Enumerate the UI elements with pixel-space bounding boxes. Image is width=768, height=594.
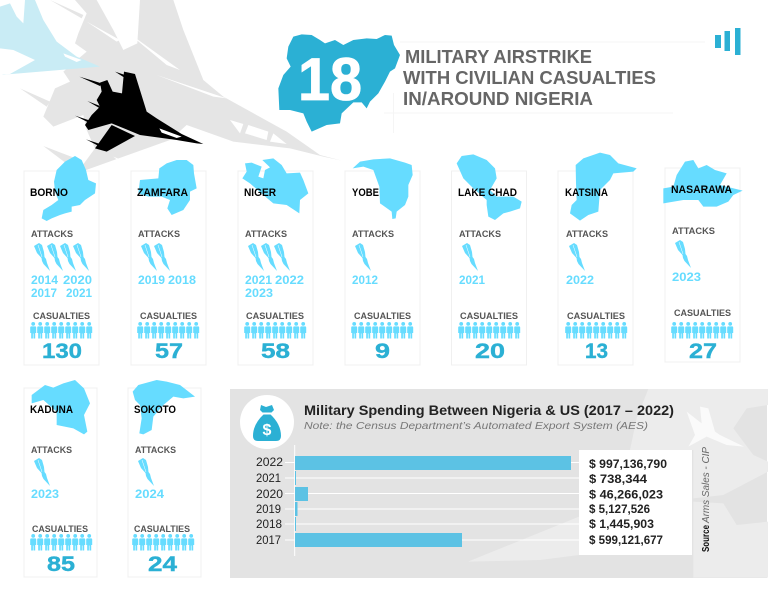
panel: Nasarawa <box>663 160 743 363</box>
panel: Nasarawa: NASARAWA <box>671 184 732 196</box>
bar chart: 2017 <box>256 535 281 547</box>
panel: Nasarawa: 27 <box>689 340 717 363</box>
panel: Borno: ATTACKS <box>31 229 73 239</box>
panel: Borno: BORNO <box>30 187 68 199</box>
panel: Nasarawa: 2023 <box>672 270 701 284</box>
panel: Niger: ATTACKS <box>245 229 287 239</box>
panel: Lake Chad: LAKE CHAD <box>458 187 517 199</box>
panel: Katsina: KATSINA <box>565 187 608 199</box>
logo: three bars <box>715 28 740 55</box>
value table: $ 1,445,903 <box>589 519 654 531</box>
panel: Zamfara: 2018 <box>168 273 196 287</box>
panel: Sokoto: 24 <box>148 553 177 576</box>
background jet: large grey silhouette <box>20 0 342 173</box>
faint header rules <box>384 42 705 133</box>
heading: Military Spending Between Nigeria & US (2017 – 2022) <box>304 403 674 418</box>
title <box>403 47 656 109</box>
panel: Katsina <box>558 153 637 365</box>
panel: Kaduna: 85 <box>47 553 75 576</box>
background jet: light blue silhouette <box>0 0 100 75</box>
panel: Yobe: ATTACKS <box>352 229 394 239</box>
bar chart: 2022 <box>256 457 283 469</box>
panel: Niger: 2021 <box>245 273 272 287</box>
panel: Niger: NIGER <box>244 187 276 199</box>
panel: Zamfara <box>131 160 206 365</box>
panel: Borno: 130 <box>42 340 82 363</box>
title: WITH CIVILIAN CASUALTIES <box>403 68 656 88</box>
source: Source <box>701 525 712 552</box>
bar chart: 2020 <box>256 489 283 501</box>
Nigeria map with 18: 18 <box>298 46 362 113</box>
panel: Lake Chad <box>452 154 526 365</box>
icon: money bag <box>240 395 294 449</box>
panel: Zamfara: 57 <box>155 340 183 363</box>
panel: Niger <box>238 158 313 365</box>
panel: Sokoto: SOKOTO <box>134 404 176 416</box>
panel: Borno: 2021 <box>66 286 92 300</box>
panel: Borno: 2020 <box>63 273 92 287</box>
panel: Lake Chad: CASUALTIES <box>460 311 518 321</box>
panel: Sokoto: 2024 <box>135 487 164 501</box>
note: Note: the Census Department’s Automated Export System (AES) <box>304 420 648 432</box>
panel: Yobe: 9 <box>375 340 390 363</box>
black fighter jet <box>75 72 203 152</box>
title: IN/AROUND NIGERIA <box>403 89 593 109</box>
panel: Yobe: 2012 <box>352 273 378 287</box>
bar chart: 2021 <box>256 473 281 485</box>
panel: Katsina: ATTACKS <box>566 229 608 239</box>
panel: Kaduna <box>24 380 97 577</box>
panel: Nasarawa: CASUALTIES <box>674 308 731 318</box>
panel: Borno: CASUALTIES <box>33 311 90 321</box>
panel: Lake Chad: 20 <box>475 340 505 363</box>
background jet in spending panel <box>468 389 768 578</box>
title: MILITARY AIRSTRIKE <box>405 47 592 67</box>
panel: Niger: CASUALTIES <box>246 311 304 321</box>
panel: Zamfara: CASUALTIES <box>140 311 197 321</box>
panel: Kaduna: KADUNA <box>30 404 73 416</box>
panel: Katsina: 13 <box>585 340 608 363</box>
bar chart: 2018 <box>256 519 282 531</box>
source: Arms Sales - CIP <box>701 447 712 524</box>
panel: Lake Chad: 2021 <box>459 273 485 287</box>
panel: Nasarawa: ATTACKS <box>672 226 715 236</box>
panel: Kaduna: ATTACKS <box>31 445 72 455</box>
bar chart <box>256 445 579 556</box>
panel: Yobe <box>345 158 420 365</box>
panel: Niger: 58 <box>261 340 290 363</box>
panel: military spending <box>230 389 768 578</box>
panel: Sokoto <box>128 380 201 577</box>
bar chart: 2019 <box>256 504 281 516</box>
panel: Zamfara: ATTACKS <box>138 229 180 239</box>
panel: Sokoto: ATTACKS <box>135 445 176 455</box>
panel: Katsina: CASUALTIES <box>567 311 625 321</box>
value table <box>579 450 692 555</box>
icon: money bag: $ <box>263 422 272 439</box>
panel: Kaduna: CASUALTIES <box>32 524 88 534</box>
value table: $ 997,136,790 <box>589 459 667 471</box>
panel: Yobe: CASUALTIES <box>354 311 411 321</box>
Nigeria map with 18 <box>278 34 400 132</box>
panel: Katsina: 2022 <box>566 273 594 287</box>
value table: $ 5,127,526 <box>589 504 650 516</box>
panel: Niger: 2023 <box>245 286 273 300</box>
panel: Borno: 2014 <box>31 273 58 287</box>
panel: Zamfara: 2019 <box>138 273 165 287</box>
value table: $ 738,344 <box>589 474 648 486</box>
panel: Kaduna: 2023 <box>31 487 59 501</box>
panel: Borno <box>24 156 99 365</box>
panel: Sokoto: CASUALTIES <box>134 524 190 534</box>
panel: Yobe: YOBE <box>352 187 379 199</box>
panel: Borno: 2017 <box>31 286 57 300</box>
panel: Niger: 2022 <box>275 273 304 287</box>
panel: Lake Chad: ATTACKS <box>459 229 501 239</box>
panel: Zamfara: ZAMFARA <box>137 187 188 199</box>
value table: $ 599,121,677 <box>589 535 663 547</box>
value table: $ 46,266,023 <box>589 490 663 502</box>
